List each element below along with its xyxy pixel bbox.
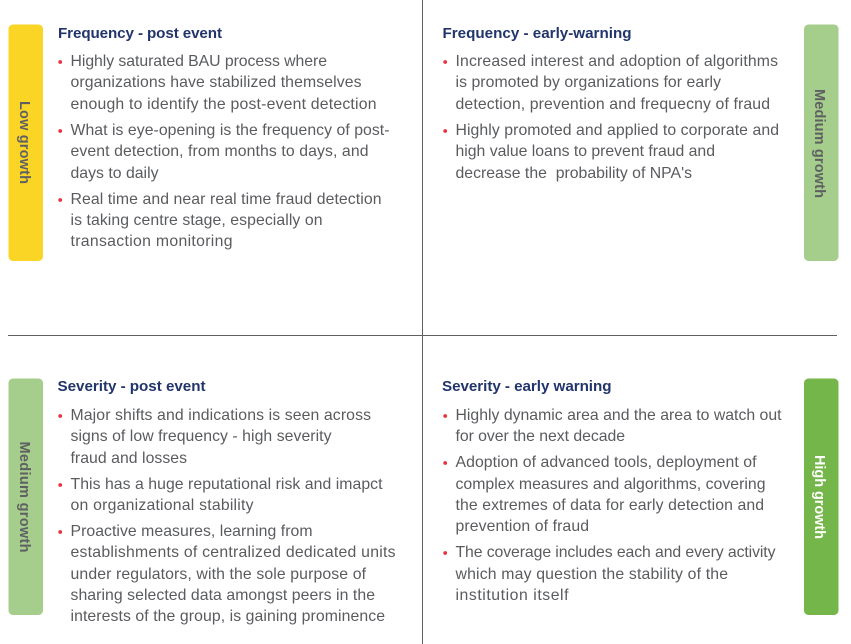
bullet list: severity post event: sharing selected data amongst peers in the — [70, 587, 375, 604]
bullet list: frequency post event: transaction monitoring — [70, 233, 232, 250]
bullet list: frequency early warning: Highly promoted and applied to corporate and — [456, 122, 779, 139]
bullet list: severity post event: under regulators, with the sole purpose of — [70, 566, 367, 583]
growth tag: medium growth — [804, 24, 838, 261]
bullet list: severity post event: signs of low frequency - high severity — [70, 428, 332, 445]
bullet list: severity early warning: Adoption of advanced tools, deployment of — [456, 454, 757, 471]
bullet list: frequency early warning — [443, 53, 779, 182]
bullet list: frequency post event: is taking centre stage, especially on — [70, 212, 322, 229]
bullet list: frequency post event: Highly saturated BAU process where — [70, 53, 327, 70]
bullet list: frequency post event — [58, 53, 390, 250]
growth tag: high growth — [804, 378, 838, 615]
bullet list: frequency post event: organizations have stabilized themselves — [70, 74, 362, 91]
bullet list: severity post event: Proactive measures, learning from — [70, 523, 312, 540]
bullet list: severity early warning: for over the next decade — [456, 428, 625, 445]
growth tag: medium growth — [8, 378, 43, 615]
bullet list: severity early warning: prevention of fraud — [456, 518, 589, 535]
bullet list: frequency post event: enough to identify the post-event detection — [70, 96, 376, 113]
heading: severity post event: Severity - post event — [58, 378, 206, 395]
growth tag: medium growth: Medium growth — [811, 89, 827, 198]
bullet list: severity post event — [58, 407, 396, 625]
bullet list: frequency post event: Real time and near real time fraud detection — [70, 191, 382, 208]
bullet list: severity post event: Major shifts and indications is seen across — [70, 407, 371, 424]
panel: severity post event — [8, 378, 396, 625]
bullet list: severity post event: establishments of centralized dedicated units — [70, 544, 396, 561]
growth tag: high growth: High growth — [811, 455, 827, 539]
bullet list: severity early warning: Highly dynamic area and the area to watch out — [456, 407, 782, 424]
bullet list: severity early warning: The coverage includes each and every activity — [456, 544, 776, 561]
bullet list: severity post event: fraud and losses — [70, 450, 187, 467]
bullet list: frequency early warning: detection, prevention and frequecny of fraud — [456, 96, 770, 113]
growth tag: low growth: Low growth — [16, 101, 32, 184]
panel: severity early warning — [442, 378, 838, 615]
bullet list: frequency post event: days to daily — [70, 165, 159, 182]
growth tag: low growth — [8, 24, 43, 261]
bullet list: frequency early warning: is promoted by organizations for early — [456, 74, 721, 91]
panel: frequency early warning — [442, 24, 838, 261]
growth tag: medium growth: Medium growth — [16, 442, 32, 552]
bullet list: severity post event: This has a huge reputational risk and imapct — [70, 476, 383, 493]
panel: frequency post event — [8, 24, 390, 261]
heading: frequency post event: Frequency - post event — [58, 25, 222, 42]
bullet list: frequency early warning: high value loans to prevent fraud and — [456, 143, 715, 160]
heading: severity early warning: Severity - early warning — [442, 378, 612, 395]
bullet list: severity post event: on organizational stability — [70, 497, 254, 514]
bullet list: frequency post event: What is eye-opening is the frequency of post- — [70, 122, 390, 139]
bullet list: severity early warning: institution itself — [456, 587, 569, 604]
bullet list: frequency early warning: Increased interest and adoption of algorithms — [456, 53, 778, 70]
bullet list: severity early warning: the extremes of data for early detection and — [456, 497, 764, 514]
bullet list: severity early warning: complex measures and algorithms, covering — [456, 476, 766, 493]
bullet list: severity post event: interests of the group, is gaining prominence — [70, 608, 385, 625]
bullet list: frequency early warning: decrease the probability of NPA's — [456, 165, 692, 182]
bullet list: severity early warning: which may question the stability of the — [454, 566, 728, 583]
bullet list: severity early warning — [443, 407, 782, 604]
bullet list: frequency post event: event detection, from months to days, and — [70, 143, 368, 160]
heading: frequency early warning: Frequency - early-warning — [442, 25, 632, 42]
